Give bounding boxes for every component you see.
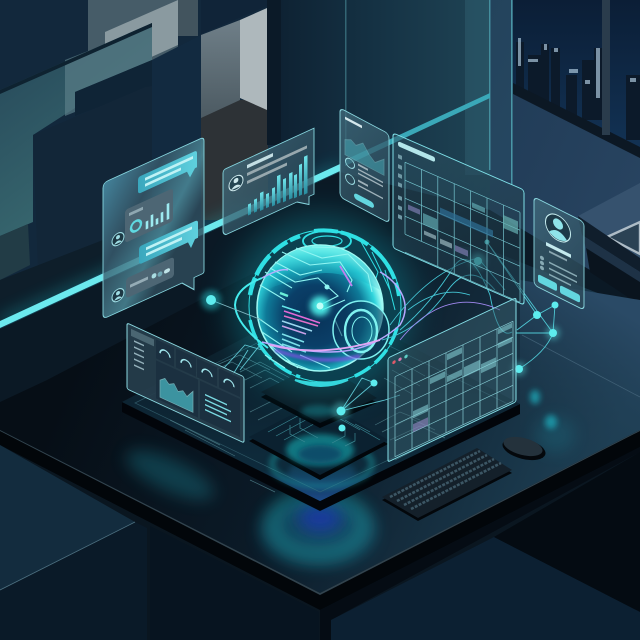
node: platform dots: [332, 380, 378, 432]
background: night city window: [513, 0, 640, 158]
sphere: purple accent: [340, 266, 352, 286]
profile name: [546, 242, 571, 264]
calendar grid: [405, 162, 520, 302]
calendar grid: [395, 321, 513, 457]
chat card: chart: [125, 188, 173, 243]
panel: front calendar: [388, 298, 516, 462]
desk: surface line on right: [522, 335, 640, 397]
stat rows: [346, 156, 383, 201]
profile buttons: [538, 274, 580, 303]
calendar sidebar: [398, 154, 402, 220]
desk reflection: blue and teal rings: [120, 390, 575, 566]
panel: chat messages: [103, 137, 204, 331]
sphere: circuit lines: [258, 247, 372, 370]
node network lines: [211, 242, 555, 411]
sphere: small circuit node: [324, 284, 330, 290]
button: [354, 192, 374, 209]
chat card: typing: [126, 257, 174, 299]
calendar header bar: [398, 141, 435, 162]
panel: analytics chart: [223, 128, 314, 244]
calendar events: [413, 323, 512, 432]
chat bubble: second: [139, 220, 198, 272]
node: left glowing dot: [201, 290, 221, 310]
sphere: central spark: [310, 296, 330, 316]
calendar events: [408, 174, 518, 278]
sphere: eye lens: [333, 301, 389, 359]
panel: dashboard: [127, 323, 244, 443]
background: floor below strip: [0, 172, 640, 440]
avatar: second: [112, 286, 124, 304]
sphere: inner core: [257, 245, 383, 371]
background: glass pane and dark panels upper left: [0, 23, 201, 322]
text lines: [247, 137, 307, 184]
desk top surface: [0, 230, 640, 593]
gauges: [156, 339, 240, 397]
sphere: lit top cap: [258, 245, 380, 296]
platform: circuit board traces: [170, 355, 450, 492]
panel: profile card: [534, 197, 584, 310]
data rows: [200, 381, 240, 437]
phone header: [345, 117, 362, 128]
node: right network dots: [470, 240, 560, 376]
avatar: [229, 173, 243, 193]
area chart: [156, 360, 198, 418]
sidebar list: [131, 329, 154, 375]
platform: middle layer: [249, 400, 388, 480]
profile list: [540, 255, 577, 289]
profile avatar: [546, 209, 570, 247]
desk: right side sheen: [520, 280, 640, 490]
mouse: [500, 433, 548, 464]
background: right rear desk with tablet: [578, 183, 640, 305]
background: bright opening in wall: [201, 0, 281, 220]
sphere: outer glow: [230, 214, 414, 398]
background: cyan light strip on wall: [0, 93, 490, 329]
panel: phone analytics: [340, 108, 389, 223]
area chart: [345, 134, 384, 175]
chat bubble: top: [138, 150, 197, 201]
panel: large calendar: [393, 133, 524, 305]
window dots: [392, 354, 408, 365]
avatar: first: [112, 230, 124, 248]
bar chart: [248, 155, 308, 220]
holographic sphere: [230, 214, 414, 398]
sphere: bottom pedestal ring: [295, 380, 348, 386]
sphere: code lines: [280, 293, 320, 352]
platform: teal ring on base: [272, 442, 372, 486]
platform: top plate: [261, 362, 377, 428]
desk front edge and lower blocks: [0, 430, 640, 640]
sphere: orbit ring: [235, 270, 405, 360]
sphere: outer shell arcs: [249, 230, 401, 382]
platform base: [122, 298, 520, 511]
keyboard: [382, 448, 512, 521]
